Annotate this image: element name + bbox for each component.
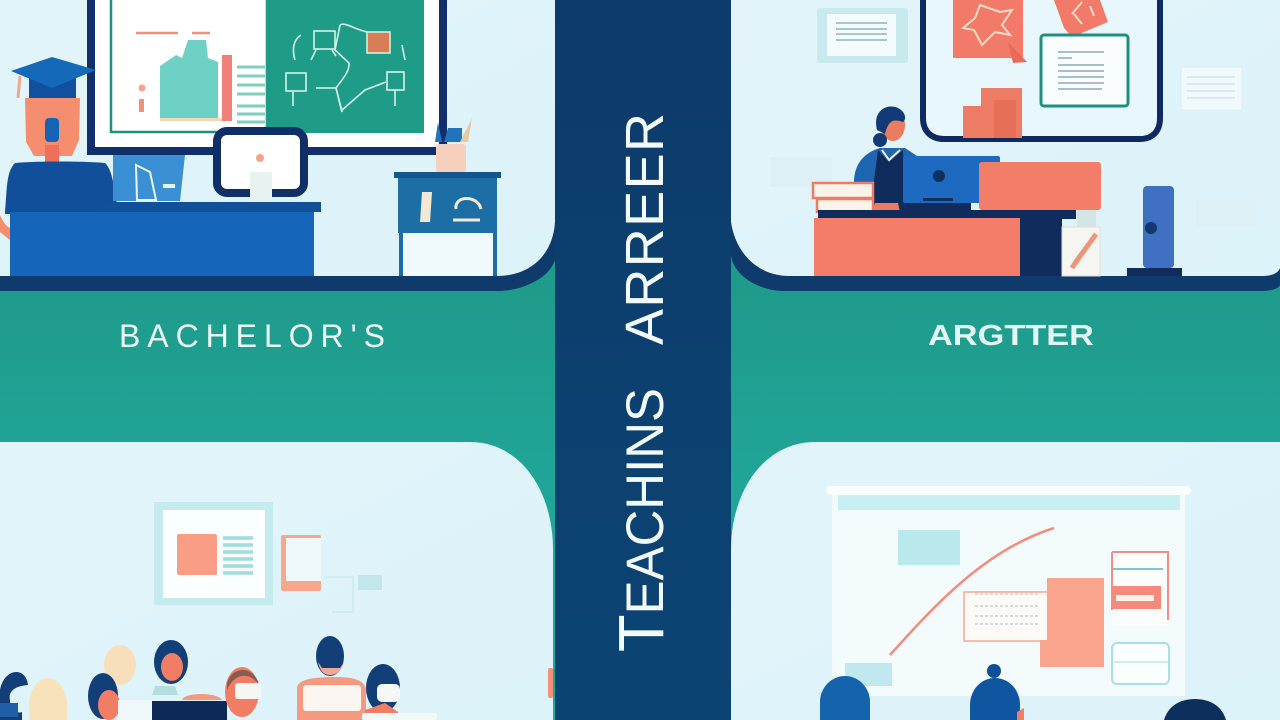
whiteboard — [91, 0, 443, 151]
vertical title: ARREER — [615, 113, 675, 345]
projection screen — [826, 486, 1191, 696]
tablet card — [281, 535, 321, 591]
faint background blocks — [770, 157, 1258, 226]
panel: bachelor's classroom — [0, 0, 556, 291]
label: master's: ARGTTER — [928, 320, 1094, 352]
panel: lecture audience — [0, 442, 553, 720]
label: bachelor's: BACHELOR'S — [119, 318, 385, 354]
note left — [817, 8, 908, 63]
audience heads — [0, 636, 553, 720]
coral box — [979, 162, 1101, 210]
center navy column — [555, 0, 731, 720]
laptop with sketch — [113, 155, 185, 201]
large tablet frame — [923, 0, 1160, 139]
desk — [10, 202, 321, 276]
laptop — [903, 156, 1000, 212]
slide frame — [154, 502, 273, 605]
side table with pen cup — [394, 118, 501, 276]
vertical title: TEACHINS — [605, 388, 677, 652]
panel: master's office — [731, 0, 1280, 291]
cup with pen — [1062, 210, 1100, 276]
panel: presentation screen — [731, 442, 1280, 720]
teacher desk — [814, 210, 1076, 276]
vertical title — [605, 113, 677, 652]
icon: desktop monitor — [217, 131, 304, 202]
faint connectors — [325, 575, 382, 612]
speaker tower — [1127, 186, 1182, 276]
teacher figure — [854, 106, 917, 212]
books stack — [813, 183, 873, 212]
graduate figure — [0, 57, 117, 240]
audience heads — [820, 664, 1226, 720]
note right — [1181, 67, 1242, 110]
